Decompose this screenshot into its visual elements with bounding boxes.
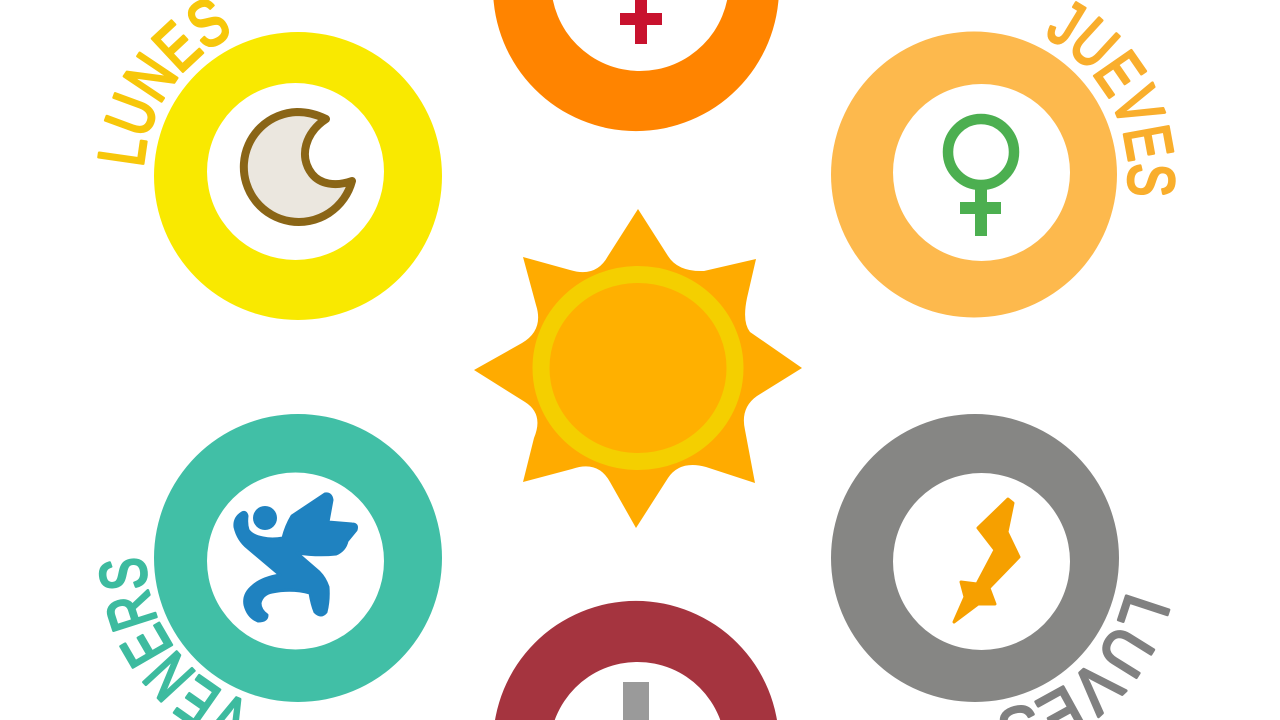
sun rays — [474, 209, 802, 528]
central sun — [474, 209, 802, 528]
orange ring — [493, 0, 779, 131]
gray ring — [831, 414, 1119, 702]
panel: top orange badge — [493, 0, 779, 131]
icon: crescent moon — [244, 112, 352, 222]
teal ring — [154, 414, 442, 702]
panel: lightning bolt badge — [831, 414, 1170, 720]
icon: winged figure — [235, 494, 356, 621]
panel: Lunes moon badge — [97, 0, 442, 320]
panel: Jueves venus badge — [831, 1, 1176, 318]
icon: red cross — [620, 0, 662, 44]
icon: lightning bolt — [954, 499, 1019, 622]
dark red ring — [493, 601, 779, 720]
yellow ring — [154, 32, 442, 320]
icon: gray bar — [623, 682, 649, 720]
panel: bottom red badge — [493, 601, 779, 720]
panel: Viernes winged figure badge — [98, 414, 442, 720]
light orange ring — [831, 31, 1117, 317]
icon: venus symbol — [948, 119, 1014, 236]
sun disc with ring — [541, 274, 735, 462]
